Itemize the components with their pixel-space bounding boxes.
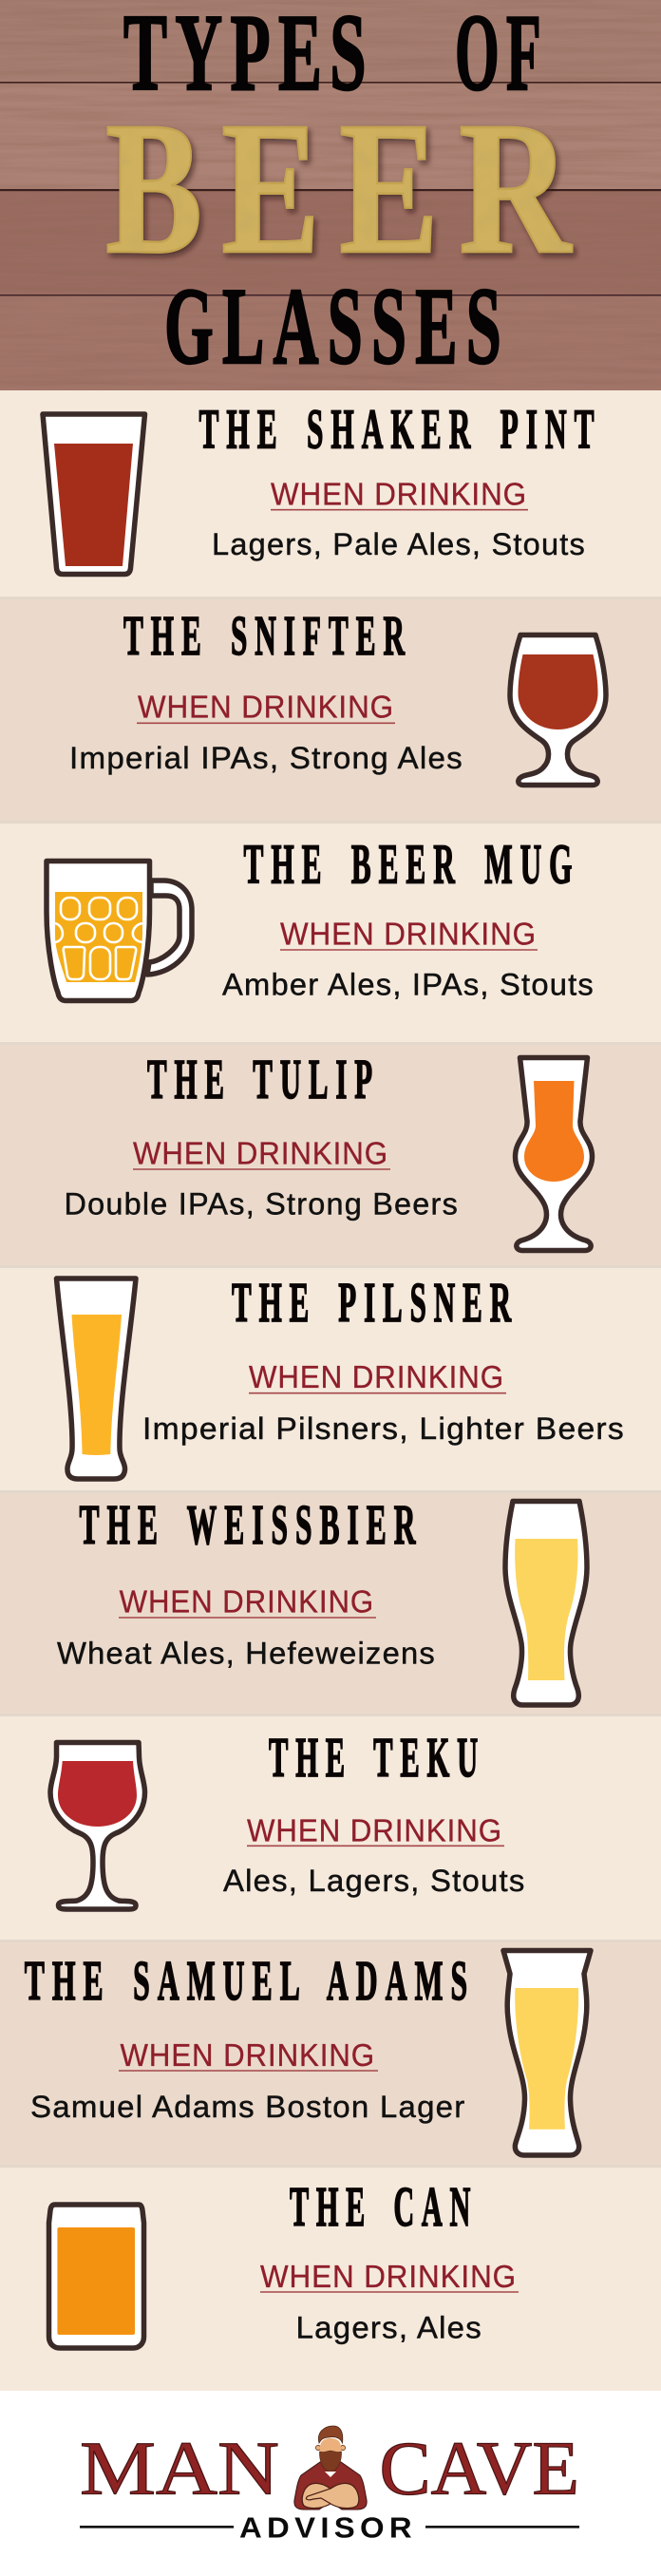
label: when drinking: WHEN DRINKING	[138, 691, 394, 726]
label: when drinking: WHEN DRINKING	[120, 1585, 374, 1620]
title: beer: E	[221, 84, 320, 294]
panel: the snifter	[0, 599, 661, 824]
icon: teku glass	[50, 1742, 144, 1909]
beer styles: Imperial Pilsners, Lighter Beers	[142, 1411, 625, 1446]
title: beer	[105, 84, 573, 294]
panel: the samuel adams	[0, 1942, 661, 2168]
beer styles: Amber Ales, IPAs, Stouts	[222, 967, 595, 1001]
beer styles: Lagers, Pale Ales, Stouts	[212, 527, 586, 561]
icon: weissbier glass	[505, 1501, 587, 1705]
heading: THE CAN	[290, 2175, 478, 2238]
heading: THE TULIP	[147, 1048, 380, 1110]
panel: the beer mug	[0, 824, 661, 1045]
beer styles: Samuel Adams Boston Lager	[30, 2090, 465, 2124]
icon: beer can	[49, 2205, 144, 2348]
panel: the teku	[0, 1716, 661, 1942]
label: when drinking: WHEN DRINKING	[249, 1360, 504, 1395]
rule left	[80, 2526, 234, 2529]
rule right	[425, 2526, 579, 2529]
panel: the weissbier	[0, 1493, 661, 1716]
panel: wood header	[0, 0, 661, 390]
logo word: man: MAN	[80, 2428, 279, 2511]
panel: the pilsner	[0, 1268, 661, 1493]
icon: pilsner glass	[57, 1279, 136, 1479]
title: beer: R	[459, 84, 573, 294]
logo word: advisor: ADVISOR	[239, 2511, 417, 2545]
logo word: cave: CAVE	[380, 2428, 579, 2511]
beer styles: Lagers, Ales	[296, 2311, 482, 2345]
title: beer: E	[339, 84, 439, 294]
label: when drinking: WHEN DRINKING	[133, 1137, 388, 1172]
heading: THE SNIFTER	[123, 604, 412, 667]
panel: the shaker pint	[0, 390, 661, 599]
icon: snifter glass	[510, 635, 606, 785]
label: when drinking: WHEN DRINKING	[280, 917, 537, 952]
label: when drinking: WHEN DRINKING	[260, 2260, 517, 2295]
icon: samuel adams glass	[503, 1951, 591, 2155]
beer styles: Wheat Ales, Hefeweizens	[57, 1637, 436, 1671]
beer styles: Imperial IPAs, Strong Ales	[69, 741, 463, 775]
beer styles: Ales, Lagers, Stouts	[223, 1864, 526, 1898]
title: beer: B	[105, 84, 202, 294]
icon: shaker pint glass	[43, 414, 144, 574]
label: when drinking: WHEN DRINKING	[247, 1813, 502, 1848]
panel: the tulip	[0, 1045, 661, 1268]
panel: the can	[0, 2168, 661, 2391]
icon: bearded man with crossed arms	[294, 2426, 367, 2510]
icon: beer mug	[47, 861, 192, 1001]
label: when drinking: WHEN DRINKING	[271, 477, 527, 513]
logo: man cave advisor	[80, 2426, 579, 2545]
beer styles: Double IPAs, Strong Beers	[65, 1187, 459, 1222]
label: when drinking: WHEN DRINKING	[120, 2038, 375, 2074]
icon: tulip glass	[515, 1058, 593, 1250]
